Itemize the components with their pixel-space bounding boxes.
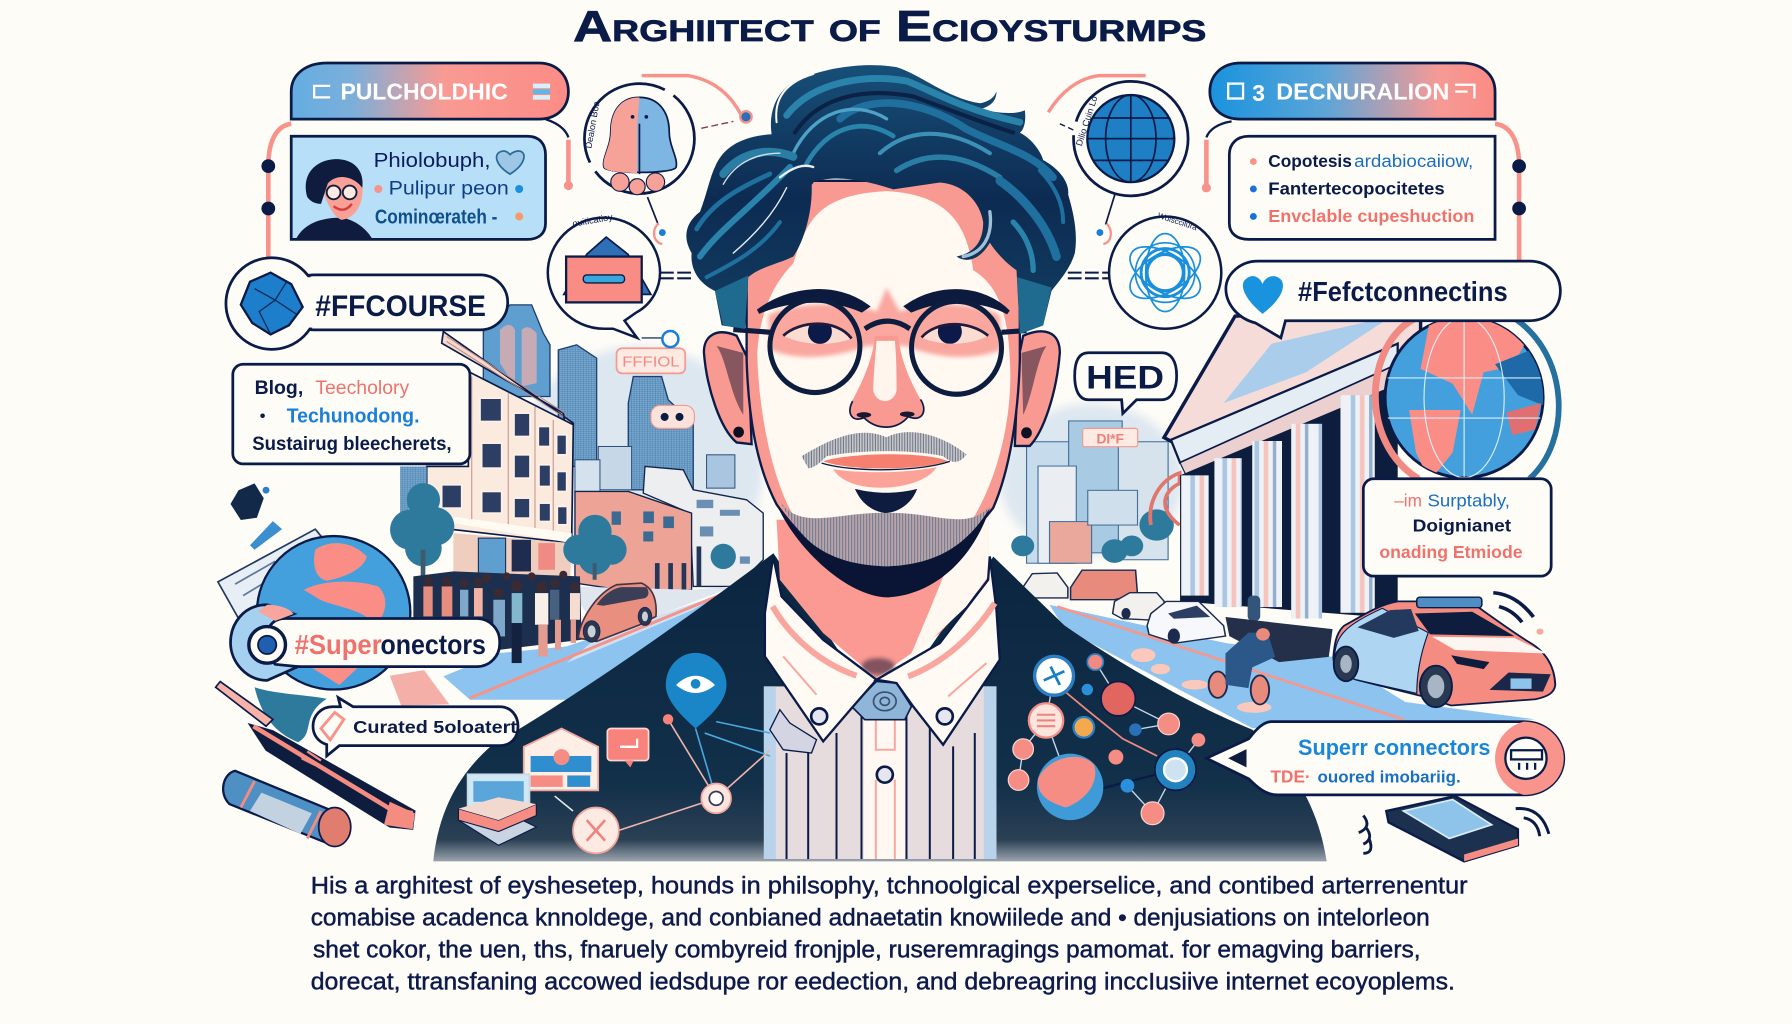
panel: right list: ardabiocaiiow, xyxy=(1354,151,1473,171)
icon: salmon badge xyxy=(573,808,619,853)
hair highlights xyxy=(697,74,1063,277)
right city scene xyxy=(1000,404,1183,563)
callout: surptably xyxy=(1363,479,1551,576)
glasses xyxy=(733,300,1027,394)
body paragraph xyxy=(311,872,1468,996)
left city scene xyxy=(390,305,763,595)
icon: book stack xyxy=(458,797,536,845)
nose xyxy=(849,336,924,427)
icon: striped tab xyxy=(533,84,550,100)
callout: surptably: onading Etmiode xyxy=(1379,542,1523,562)
icon: house envelope bubble xyxy=(548,212,678,347)
eyes xyxy=(782,322,989,344)
icon: bell bubble: Dealon Boa xyxy=(583,99,602,149)
crowd xyxy=(413,571,582,650)
left globe with document xyxy=(218,529,449,742)
icon: house envelope bubble: ouiticatioy xyxy=(572,212,614,229)
car: large salmon robotaxi xyxy=(1333,593,1555,707)
connector: right salmon rail xyxy=(1202,121,1526,261)
shirt xyxy=(764,681,996,859)
panel: left profile xyxy=(291,136,546,239)
icon: ring node xyxy=(701,783,731,813)
eyebrows xyxy=(758,291,867,312)
ground floor xyxy=(453,533,572,586)
ear: left xyxy=(704,332,752,444)
connector: globe to portrait xyxy=(1048,76,1146,244)
callout: surptably: Surptably, xyxy=(1427,490,1510,510)
salmon mid building xyxy=(575,491,692,595)
face shape xyxy=(747,181,1020,577)
header: right xyxy=(1210,63,1495,119)
callout: blog: Techunodong. xyxy=(287,405,420,428)
body paragraph: comabise acadenca knnoldege, and conbianed adnaetatin knowiilede and • denjusiations on intelorleon xyxy=(311,904,1430,931)
tree: right xyxy=(563,515,627,580)
hashtag: #Superonectors: onectors xyxy=(381,629,486,660)
skyscrapers xyxy=(483,305,693,490)
hashtag: #Superonectors: #Super xyxy=(295,629,382,660)
callout: blog: Sustairug bleecherets, xyxy=(252,433,452,455)
icon: heart xyxy=(497,151,524,174)
header: right: 3 xyxy=(1252,80,1265,106)
rolled document xyxy=(223,771,351,846)
hotel sign: FFFIOL xyxy=(622,355,680,371)
hashtag: #Superonectors xyxy=(231,605,500,680)
ear: right xyxy=(1015,331,1060,446)
icon: bracket xyxy=(314,86,330,97)
eye band xyxy=(768,288,1002,357)
pencil and pen xyxy=(216,682,415,829)
panel: right list: Envclable cupeshuction xyxy=(1268,206,1474,226)
callout: super connectors: TDE· xyxy=(1271,766,1311,786)
temple visitor xyxy=(1248,596,1260,621)
icon: house card xyxy=(524,728,598,790)
callout: super connectors xyxy=(1206,722,1564,795)
icon: blue gem xyxy=(241,273,303,334)
icon: blue heart xyxy=(1243,276,1283,314)
icon: laptop xyxy=(468,774,529,809)
callout: blog xyxy=(233,364,470,464)
icon: blue ring node xyxy=(1155,749,1196,790)
icon: globe bubble xyxy=(1074,81,1188,196)
white row buildings xyxy=(643,466,763,586)
sideburns xyxy=(715,275,1051,334)
car: salmon hatchback xyxy=(578,583,656,642)
small cube and tool icons xyxy=(231,483,282,550)
icon: bell bubble xyxy=(583,84,694,195)
jacket xyxy=(433,553,1327,861)
hed speech bubble: HED xyxy=(1086,359,1164,395)
icon: small globe node xyxy=(1037,754,1103,820)
icon: corner bracket xyxy=(1455,85,1474,99)
connector: bell to portrait xyxy=(642,76,752,244)
icon: checkbox xyxy=(1228,84,1243,99)
callout: super connectors: Superr connectors xyxy=(1298,735,1490,760)
right jacket network xyxy=(1008,654,1205,825)
diner sign: DI*F xyxy=(1096,431,1124,446)
icon: swirl bubble xyxy=(1109,211,1221,329)
header: right: DECNURALION xyxy=(1276,79,1449,105)
hashtag: #FFCOURSE xyxy=(226,258,508,349)
panel: right list: Copotesis xyxy=(1268,151,1352,171)
panel: right list: Fantertecopocitetes xyxy=(1268,179,1445,199)
icon: salmon shapes xyxy=(321,712,344,740)
hotel sign xyxy=(617,348,685,373)
face highlight xyxy=(757,191,1010,551)
title: Arghiitect of Ecioysturmps xyxy=(573,3,1206,51)
body paragraph: His a arghitest of eyshesetep, hounds in philsophy, tchnoolgical experselice, and contibed arterrenentur xyxy=(311,872,1468,899)
icon: salmon badge xyxy=(1495,722,1564,795)
hashtag: #Fefctconnectins: #Fefctconnectins xyxy=(1298,276,1508,307)
neck, collar and shirt xyxy=(764,520,1000,859)
hashtag: #FFCOURSE: #FFCOURSE xyxy=(315,290,486,323)
right collar xyxy=(876,556,1000,745)
callout: blog: Blog, xyxy=(255,377,303,399)
road barrier xyxy=(1225,617,1333,662)
speech dots sign xyxy=(651,405,694,428)
distant blocks xyxy=(575,446,735,493)
icon: chat card xyxy=(607,728,649,767)
panel: left profile: Pulipur peon xyxy=(389,178,509,200)
portrait: head xyxy=(686,65,1076,597)
callout: curated: Curated 5oloatert xyxy=(353,717,517,737)
icon: globe bubble: Dilio Cuin Lo xyxy=(1074,95,1100,147)
right globe xyxy=(1375,309,1559,486)
under-chin shadow xyxy=(777,504,990,597)
left street and crowd xyxy=(413,558,772,700)
callout: curated xyxy=(313,698,518,756)
beard xyxy=(780,501,990,573)
icon: swirl bubble: Wdisccilura xyxy=(1157,211,1199,232)
lapel pin xyxy=(770,710,817,753)
panel: left profile: Phiolobuph, xyxy=(374,149,491,172)
main building xyxy=(442,332,573,466)
tree: left xyxy=(390,483,454,576)
icon: small portrait xyxy=(296,159,373,239)
cyclist xyxy=(1209,628,1275,704)
header: left xyxy=(291,63,568,119)
panel: left profile: Cominœrateh - xyxy=(375,205,498,228)
body paragraph: dorecat, ttransfaning accowed iedsdupe ror eedection, and debreagring inccIusiive internet ecoyoplems. xyxy=(311,969,1455,996)
icon: list node xyxy=(1029,703,1063,738)
right street with traffic xyxy=(1023,570,1555,728)
temple xyxy=(1164,307,1421,621)
body paragraph: shet cokor, the uen, ths, fnaruely combyreid fronjple, ruseremragings pamomat. for emagving barriers, xyxy=(313,937,1421,964)
building windows xyxy=(442,398,567,525)
neck skin xyxy=(777,520,988,678)
icon: plane node xyxy=(1035,656,1074,695)
icon: tablet device xyxy=(1359,796,1549,861)
icon: location pin with eye xyxy=(666,653,726,728)
hair xyxy=(686,65,1076,334)
connector: left double line xyxy=(660,273,691,278)
connector: right double line xyxy=(1068,273,1109,278)
callout: blog: Teecholory xyxy=(315,377,409,399)
callout: surptably: –im xyxy=(1394,490,1422,510)
hed speech bubble xyxy=(1075,353,1177,413)
hashtag: #Fefctconnectins xyxy=(1226,261,1560,338)
car: small white xyxy=(1023,570,1225,643)
callout: super connectors: ouored imobariig. xyxy=(1318,767,1461,786)
left collar xyxy=(765,556,876,741)
connector: left salmon rail xyxy=(261,119,573,258)
moustache xyxy=(802,432,967,468)
header: left: PULCHOLDHIC xyxy=(340,79,508,105)
goatee xyxy=(855,489,917,513)
diner sign xyxy=(1083,428,1138,447)
mouth xyxy=(822,454,950,488)
callout: surptably: Doignianet xyxy=(1413,515,1511,535)
left jacket network xyxy=(458,653,770,853)
panel: right list xyxy=(1229,136,1495,239)
